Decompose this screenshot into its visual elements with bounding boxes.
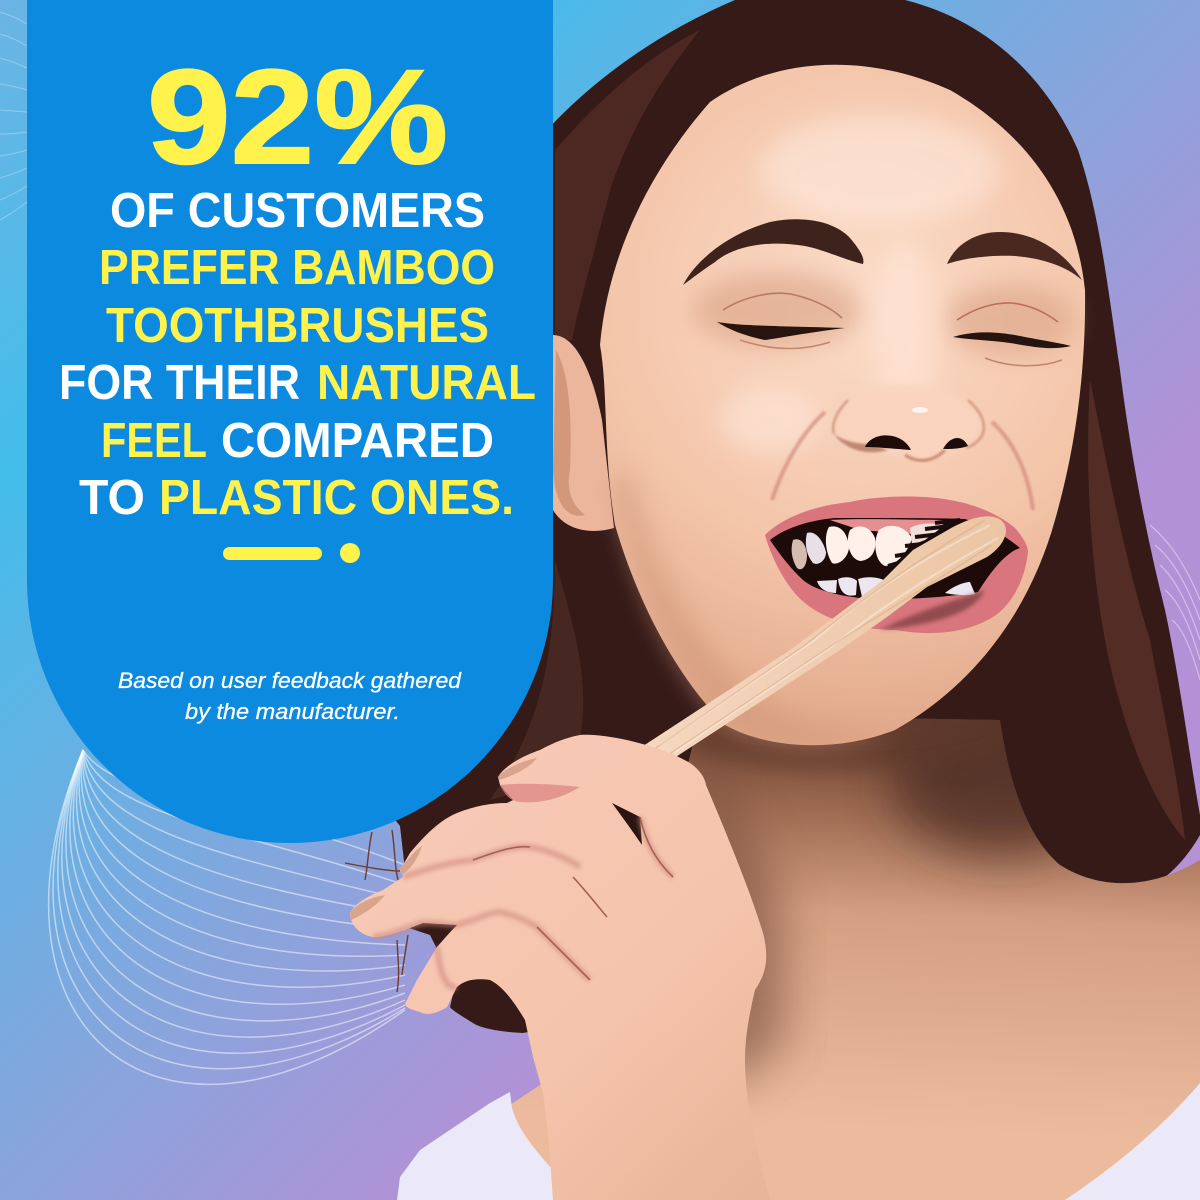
big number: 92%: 92% <box>147 43 448 192</box>
decorative line fan: lower left <box>49 750 405 1084</box>
lower teeth <box>817 577 975 597</box>
panel: blue statistic card <box>27 0 553 843</box>
woman brushing teeth <box>300 0 1200 1200</box>
hair back <box>300 0 1200 1033</box>
headline text: TO <box>79 471 145 525</box>
finger gaps and creases <box>612 803 642 845</box>
headline text: TOOTHBRUSHES <box>106 299 489 353</box>
source note <box>118 668 462 724</box>
eyebrow left <box>683 219 863 285</box>
decorative lines: top left <box>0 12 27 220</box>
closed eye left <box>717 293 845 349</box>
lower lip shadow <box>880 590 985 630</box>
headline text: OF CUSTOMERS <box>110 184 485 238</box>
headline text: NATURAL <box>317 356 536 410</box>
closed eye right <box>953 303 1071 366</box>
divider dash and dot <box>223 543 360 563</box>
mouth <box>765 496 1028 633</box>
bamboo toothbrush <box>640 516 1006 764</box>
white shirt <box>397 1083 1200 1200</box>
nails <box>350 758 537 920</box>
upper teeth <box>792 523 945 569</box>
headline text <box>59 184 536 525</box>
decorative lines: right <box>1150 525 1200 680</box>
nose <box>833 385 984 462</box>
source note: Based on user feedback gathered <box>118 668 462 693</box>
ear <box>553 335 614 531</box>
headline text: COMPARED <box>221 414 494 468</box>
headline text: PLASTIC ONES. <box>159 471 514 525</box>
neck and chest <box>510 700 1200 1200</box>
headline text: FOR THEIR <box>59 356 300 410</box>
face <box>600 65 1085 745</box>
headline text: PREFER BAMBOO <box>99 241 495 295</box>
headline text: FEEL <box>101 414 207 468</box>
stray hair strands <box>345 830 408 992</box>
source note: by the manufacturer. <box>185 699 400 724</box>
eyebrow right <box>947 232 1082 280</box>
hand <box>350 735 770 1200</box>
bristles <box>883 520 960 578</box>
smile lines <box>772 412 1033 510</box>
face shading <box>612 115 1075 745</box>
